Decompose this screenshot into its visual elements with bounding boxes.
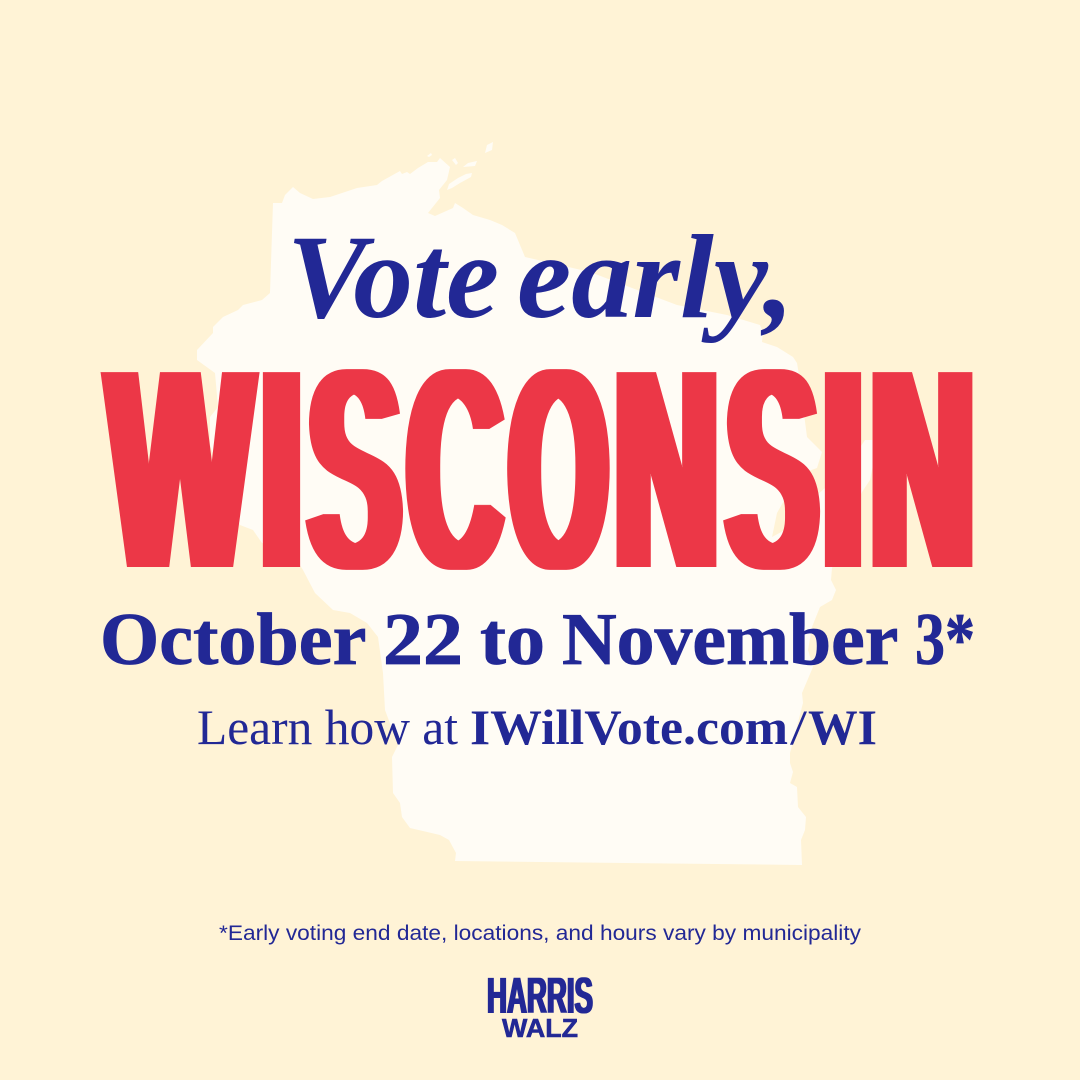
heading: Vote early,: early, [517, 210, 794, 343]
heading: WISCONSIN: I [824, 306, 862, 632]
heading: WISCONSIN: I [261, 306, 302, 632]
logo: Harris Walz [487, 967, 593, 1043]
heading: WISCONSIN: S [726, 306, 818, 632]
map: Wisconsin silhouette [197, 142, 874, 865]
map: Apostle Islands [427, 142, 493, 190]
heading: WISCONSIN: C [408, 306, 502, 632]
date line: October 22 to November 3*: October [100, 599, 365, 681]
footnote: *Early voting end date, locations, and hours vary by municipality [219, 921, 861, 945]
infographic canvas: N [871, 306, 974, 632]
logo: HARRIS: HARRIS [487, 967, 593, 1024]
heading: WISCONSIN: S [308, 306, 400, 632]
call to action: Learn how at IWillVote.com/WI: WI [808, 699, 877, 755]
heading: WISCONSIN: O [510, 306, 607, 632]
call to action: Learn how at IWillVote.com/WI: / [790, 699, 807, 755]
heading: WISCONSIN: W [108, 306, 254, 632]
call to action: Learn how at IWillVote.com/WI: Learn how at [197, 699, 458, 755]
heading: Vote early,: Vote [287, 210, 499, 343]
date line: October 22 to November 3*: to [480, 599, 545, 681]
date line: October 22 to November 3*: November [562, 599, 898, 681]
heading: WISCONSIN: N [615, 306, 718, 632]
date line: October 22 to November 3*: 22 [383, 599, 463, 681]
date line: October 22 to November 3*: 3* [915, 599, 975, 681]
call to action: Learn how at IWillVote.com/WI: IWillVote.com [470, 699, 788, 755]
logo: WALZ: WALZ [502, 1013, 578, 1043]
